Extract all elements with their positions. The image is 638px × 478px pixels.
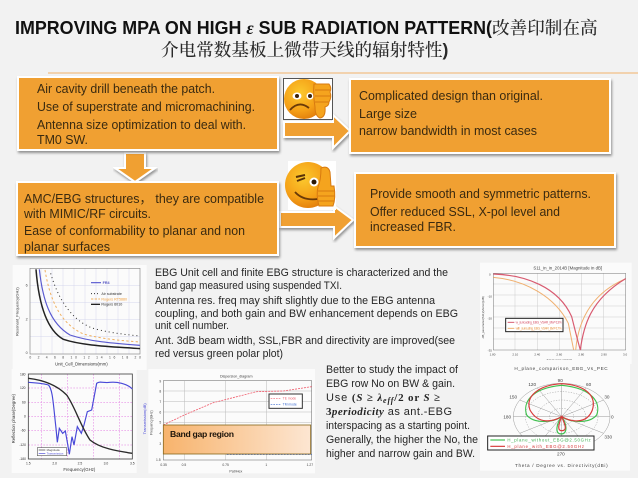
chart: reflection phase and transmission: Magnitude — [47, 448, 60, 452]
chart: H-plane polar plot: 120 — [528, 382, 537, 387]
text block: EBG characterization: EBG Unit cell and finite EBG structure is characterized and the — [155, 267, 448, 279]
chart: S11 magnitude — [480, 263, 632, 364]
chart: dispersion diagram: 0.75 — [222, 463, 229, 467]
panel: drawbacks — [350, 79, 610, 153]
panel: conventional techniques: TM0 SW. — [37, 132, 88, 147]
text block: EBG row study: Generally, the higher the No, the — [326, 434, 478, 446]
chart: resonant frequency vs unit cell dimensions: Air substrate — [101, 292, 122, 296]
chart: S11 magnitude: 2.90 — [601, 353, 607, 357]
chart: dispersion diagram: Frequency(GHz) — [150, 410, 154, 435]
chart: H-plane polar plot: Theta / Degree vs. Directivity(dBi) — [515, 463, 608, 468]
text block: EBG characterization: Ant. 3dB beam width, SSL,FBR and directivity are improved(see — [155, 335, 455, 347]
chart: S11 magnitude: -35 — [488, 348, 492, 352]
chart: resonant frequency vs unit cell dimensions: Rogers 6010 — [101, 303, 122, 307]
chart: resonant frequency vs unit cell dimensions — [13, 265, 147, 370]
chart: reflection phase and transmission: 180 — [20, 373, 26, 377]
text block: EBG characterization: coupling, and both gain and BW enhancement depends on EBG — [155, 308, 458, 320]
panel: benefits: Provide smooth and symmetric patterns. — [370, 186, 591, 201]
chart: reflection phase and transmission — [11, 369, 147, 473]
chart: S11 magnitude: 3.0 — [623, 353, 627, 357]
chart: resonant frequency vs unit cell dimensions: 0 2 4 6 8 10 12 14 16 18 20 — [29, 356, 141, 360]
text block: EBG row study: /2 or — [393, 392, 423, 404]
icon: winking face thumbs up — [285, 161, 336, 210]
chart: dispersion diagram: TE mode — [283, 397, 296, 401]
chart: dispersion diagram: 8 — [159, 390, 161, 394]
chart: H-plane polar plot: H_plane_comparison_EBG_Vs_PEC — [514, 366, 608, 371]
panel: AMC/EBG structures: planar surfaces — [24, 239, 110, 254]
title: 改善印制在高 — [492, 15, 598, 40]
chart: resonant frequency vs unit cell dimensions: 2 — [26, 318, 28, 322]
panel: AMC/EBG structures: AMC/EBG structures， they are compatible — [24, 191, 264, 206]
chart: dispersion diagram: 6 — [159, 410, 161, 414]
arrow: right to benefits box — [280, 206, 353, 238]
arrow: down from top-left box to AMC box — [115, 153, 155, 182]
chart: reflection phase and transmission: -180 — [19, 457, 26, 461]
chart: dispersion diagram: 5 — [159, 421, 161, 425]
chart: H-plane polar plot: H_plane_without_EBG@2.50GHz — [507, 438, 591, 443]
chart: dispersion diagram: 1.5 — [156, 458, 161, 462]
text block: EBG row study: interspacing as a starting point. — [326, 420, 470, 432]
text block: EBG row study — [326, 364, 478, 460]
text block: EBG row study: higher and narrow gain and BW. — [326, 448, 475, 460]
chart: dispersion diagram: Pat/Hex — [229, 469, 243, 473]
text block: EBG characterization: Antenna res. freq may shift slightly due to the EBG antenna — [155, 295, 436, 307]
panel: conventional techniques: Use of superstrate and micromachining. — [37, 99, 255, 114]
chart: dispersion diagram: 4 — [159, 431, 161, 435]
text block: EBG characterization: red versus green polar plot) — [155, 348, 283, 360]
text block: EBG characterization: unit cell number. — [155, 320, 229, 332]
chart: resonant frequency vs unit cell dimensions: Rogers RT5880 — [101, 297, 127, 301]
text block: EBG row study: Better to study the impact of — [326, 364, 459, 376]
chart: reflection phase and transmission: 60 — [22, 400, 26, 404]
text block: EBG characterization: band gap measured using suspended TXI. — [155, 280, 342, 292]
chart: reflection phase and transmission: 2.0 — [52, 462, 57, 466]
chart: H-plane polar plot: 180 — [503, 414, 512, 419]
chart: H-plane polar plot — [480, 360, 630, 471]
chart: resonant frequency vs unit cell dimensions: 6 — [26, 284, 28, 288]
chart: reflection phase and transmission: 3.5 — [130, 462, 135, 466]
panel: drawbacks: Large size — [359, 106, 417, 121]
text block: EBG row study: EBG row No on BW & gain. — [326, 378, 455, 390]
chart: resonant frequency vs unit cell dimensions: FR4 — [103, 281, 111, 285]
chart: resonant frequency vs unit cell dimensions: Unit_Cell_Dimensions(mm) — [55, 361, 108, 366]
chart: resonant frequency vs unit cell dimensions: Resonant_Frequency(GHz) — [14, 287, 19, 336]
chart: S11 magnitude: w_surrouding_EBG_VSAR_BW=13% — [516, 321, 562, 325]
chart: dispersion diagram: 1 — [265, 463, 267, 467]
chart: S11 magnitude: Frequency (GHz) — [547, 358, 572, 362]
chart: reflection phase and transmission: 3.0 — [104, 462, 108, 466]
panel: conventional techniques: Air cavity drill beneath the patch. — [37, 81, 215, 96]
chart: reflection phase and transmission: -60 — [21, 429, 26, 433]
panel: drawbacks: Complicated design than original. — [359, 88, 543, 103]
panel: conventional techniques — [18, 77, 278, 150]
title: 介电常数基板上微带天线的辐射特性) — [161, 37, 448, 62]
panel: conventional techniques: Antenna size optimization to deal with. — [37, 117, 246, 132]
chart: H-plane polar plot: 30 — [604, 395, 610, 400]
chart: reflection phase and transmission: 1.5 — [26, 462, 31, 466]
arrow: right to drawbacks box — [284, 115, 350, 148]
chart: reflection phase and transmission: 0 — [24, 415, 26, 419]
chart: S11 magnitude: S11_in_in_2014B [Magnitude in dB] — [533, 266, 602, 271]
panel: benefits: Offer reduced SSL, X-pol level and — [370, 204, 560, 219]
chart: reflection phase and transmission: Frequency(GHz) — [63, 467, 96, 472]
chart: dispersion diagram — [148, 369, 315, 473]
chart: H-plane polar plot: 90 — [558, 378, 563, 383]
text block: EBG row study: S ≥ — [423, 392, 440, 404]
chart: reflection phase and transmission: -120 — [19, 443, 26, 447]
chart: dispersion diagram: 0.35 — [160, 463, 167, 467]
chart: H-plane polar plot: 270 — [557, 452, 565, 457]
chart: H-plane polar plot: 330 — [604, 434, 613, 439]
chart: S11 magnitude: 2.60 — [556, 353, 562, 357]
chart: reflection phase and transmission: Reflection phase(Degree) — [11, 393, 16, 443]
chart: S11 magnitude: 2.10 — [512, 353, 518, 357]
chart: S11 magnitude: dB_parameter(S11)(Vector)(dB) — [481, 296, 485, 338]
chart: S11 magnitude: 0 — [489, 272, 491, 276]
chart: dispersion diagram: 0.5 — [182, 463, 186, 467]
chart: dispersion diagram: 9 — [159, 379, 161, 383]
chart: H-plane polar plot: 0 — [611, 414, 614, 419]
chart: H-plane polar plot: 60 — [586, 382, 592, 387]
chart: dispersion diagram: Dispersion_diagram — [220, 374, 253, 378]
panel: drawbacks: narrow bandwidth in most cases — [359, 123, 537, 138]
chart: H-plane polar plot: 150 — [509, 395, 518, 400]
text block: EBG row study: 3periodicity as ant.-EBG — [326, 406, 452, 418]
text block: EBG row study: eff — [383, 396, 395, 405]
title: IMPROVING MPA ON HIGH ε SUB RADIATION PATTERN( — [15, 18, 492, 38]
icon: sad face thumbs down — [284, 78, 332, 120]
chart: H-plane polar plot: H_plane_with_EBG@2.50GHz — [507, 444, 584, 449]
chart: resonant frequency vs unit cell dimensions: 0 — [26, 351, 28, 355]
chart: S11 magnitude: 2.40 — [534, 353, 540, 357]
label: band gap region: Band gap region — [170, 429, 234, 439]
chart: S11 magnitude: -10 — [488, 294, 492, 298]
text block: EBG row study: Use (S ≥ λ — [326, 392, 382, 404]
chart: dispersion diagram: 7 — [159, 400, 161, 404]
panel: AMC/EBG structures: with MIMIC/RF circuits. — [23, 206, 151, 221]
chart: S11 magnitude: -20 — [488, 316, 492, 320]
text block: EBG characterization — [155, 267, 458, 360]
chart: reflection phase and transmission: 2.5 — [78, 462, 82, 466]
chart: S11 magnitude: with_surrouding_EBG_VSAR_BW=17% — [516, 327, 562, 331]
panel: benefits: increased FBR. — [370, 219, 456, 234]
chart: reflection phase and transmission: Transmission(dB) — [142, 403, 147, 434]
panel: benefits — [355, 173, 615, 247]
chart: reflection phase and transmission: 120 — [20, 386, 26, 390]
chart: reflection phase and transmission: Transmission — [47, 451, 64, 455]
panel: AMC/EBG structures: Ease of conformability to planar and non — [24, 223, 245, 238]
title — [15, 15, 598, 62]
chart: dispersion diagram: 1.27 — [307, 463, 313, 467]
chart: S11 magnitude: 2.80 — [578, 353, 584, 357]
chart: S11 magnitude: 1.80 — [490, 353, 496, 357]
chart: dispersion diagram: 3 — [159, 442, 161, 446]
chart: dispersion diagram: TM mode — [283, 403, 297, 407]
panel: AMC/EBG structures — [17, 182, 278, 255]
